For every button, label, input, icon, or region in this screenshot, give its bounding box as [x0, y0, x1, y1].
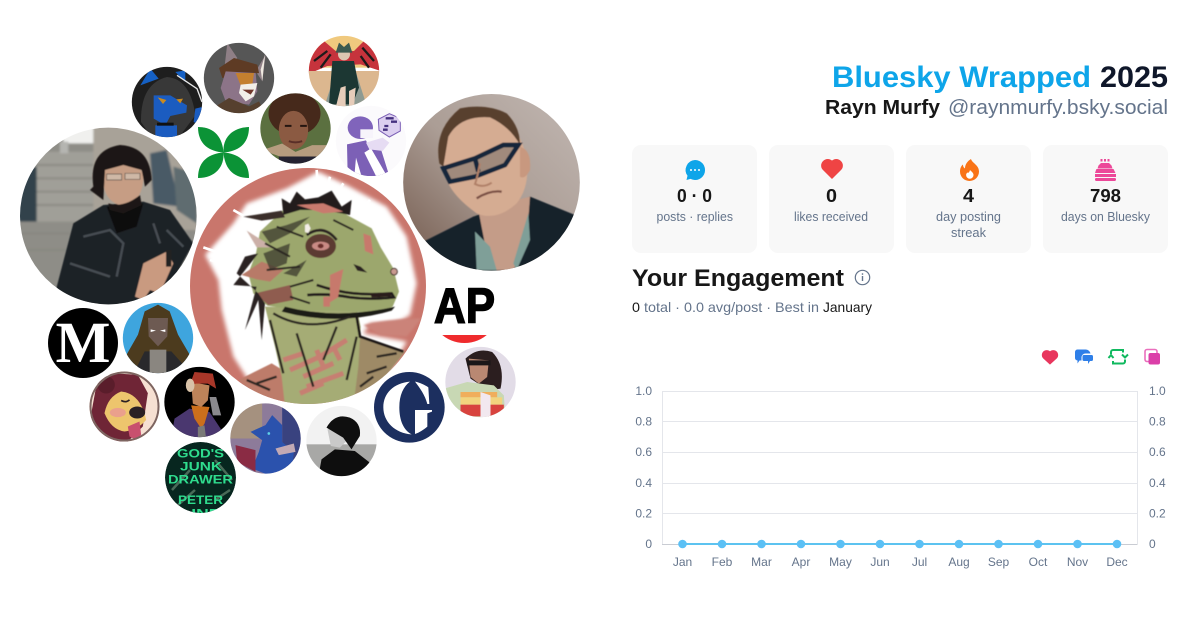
- avatar: woman with curly hair: [259, 92, 332, 166]
- stat card: likes received: likes received: [794, 210, 868, 224]
- avatar: large dragon illustration: [190, 160, 430, 410]
- avatar: God's Junk Drawer book cover: PETER: [178, 493, 223, 507]
- stat card: posts and replies: [632, 145, 757, 253]
- stat card: days on Bluesky: days on Bluesky: [1061, 210, 1151, 224]
- avatar: man in leather jacket: [20, 128, 197, 304]
- avatar: long-haired anime character: [121, 301, 195, 375]
- engagement summary: 0: [632, 299, 640, 315]
- month labels: Jan: [673, 555, 692, 569]
- icon: chat bubble: [686, 160, 705, 180]
- left axis labels: 0.6: [635, 445, 652, 459]
- avatar: God's Junk Drawer book cover: [165, 442, 236, 520]
- avatar: God's Junk Drawer book cover: GOD'S: [177, 446, 224, 460]
- avatar: anime figure on red background: [307, 34, 381, 108]
- icon: replies: [1075, 349, 1093, 364]
- avatar: God's Junk Drawer book cover: DRAWER: [168, 472, 233, 486]
- stat card: posting streak: [906, 145, 1031, 253]
- avatar: man with glasses: [400, 93, 583, 277]
- avatar: woman in sunglasses and unicorn shirt: [444, 345, 517, 419]
- month labels: Aug: [948, 555, 970, 569]
- stat card: posting streak: day posting: [936, 210, 1001, 224]
- user name and handle: @raynmurfy.bsky.social: [948, 97, 1168, 119]
- right axis labels: 0: [1149, 537, 1156, 551]
- stat card: likes received: 0: [826, 186, 837, 206]
- avatar: red-haired man in purple coat: [163, 365, 236, 439]
- avatar: Guardian G logo: [374, 372, 445, 443]
- avatar: AP logo: AP: [434, 280, 495, 334]
- avatar: fox character: [202, 41, 276, 115]
- heading: Your Engagement: Your Engagement: [632, 265, 844, 292]
- avatar: Medium M logo: M: [56, 310, 110, 375]
- user name and handle: [825, 97, 1168, 119]
- month labels: Sep: [988, 555, 1009, 569]
- avatar: God's Junk Drawer book cover: LINE: [180, 506, 220, 520]
- icon: quotes: [1145, 350, 1160, 364]
- line chart: monthly engagement: [635, 384, 1166, 569]
- avatar: black and white photo of woman: [305, 404, 378, 478]
- engagement summary: total · 0.0 avg/post · Best in: [644, 299, 819, 315]
- icon: info: [855, 270, 870, 285]
- icon: cake: [1095, 159, 1116, 181]
- right axis labels: 0.4: [1149, 476, 1166, 490]
- right axis labels: 0.2: [1149, 506, 1166, 520]
- icon: heart: [822, 160, 842, 178]
- month labels: Nov: [1067, 555, 1088, 569]
- stat card: posts and replies: posts · replies: [656, 210, 733, 224]
- avatar: God's Junk Drawer book cover: JUNK: [180, 460, 222, 474]
- user name and handle: Rayn Murfy: [825, 97, 941, 119]
- stat card: likes received: [769, 145, 894, 253]
- icon: flame: [960, 159, 979, 181]
- month labels: [673, 555, 1128, 569]
- avatar: black and blue furry: [130, 65, 204, 140]
- avatar: blue dragon reading a book: [229, 402, 302, 475]
- left axis labels: 0.8: [635, 414, 652, 428]
- right axis labels: 1.0: [1149, 384, 1166, 398]
- month labels: Mar: [751, 555, 772, 569]
- stat card: posting streak: streak: [951, 226, 987, 240]
- avatar: cartoon bear with tongue: [88, 370, 161, 443]
- month labels: Dec: [1106, 555, 1128, 569]
- engagement summary: January: [823, 299, 872, 315]
- left axis labels: 0.2: [635, 506, 652, 520]
- avatar: green four-petal logo: [198, 127, 249, 178]
- month labels: Feb: [712, 555, 733, 569]
- icon: likes: [1042, 351, 1058, 364]
- month labels: Apr: [792, 555, 810, 569]
- stat card: posting streak: 4: [963, 186, 974, 206]
- right axis labels: 0.8: [1149, 414, 1166, 428]
- right axis labels: 0.6: [1149, 445, 1166, 459]
- chart legend icons: [1042, 349, 1160, 364]
- avatar: purple line art with dice: [347, 113, 401, 176]
- left axis labels: [635, 384, 652, 551]
- month labels: Jun: [870, 555, 890, 569]
- left axis labels: 0.4: [635, 476, 652, 490]
- right axis labels: [1149, 384, 1166, 551]
- left axis labels: 1.0: [635, 384, 652, 398]
- month labels: Oct: [1029, 555, 1048, 569]
- month labels: Jul: [912, 555, 927, 569]
- avatar: AP logo: [434, 288, 494, 343]
- title: 2025: [1100, 61, 1168, 94]
- month labels: May: [829, 555, 852, 569]
- stat card: days on Bluesky: [1043, 145, 1168, 253]
- avatar cluster: [10, 30, 583, 520]
- left axis labels: 0: [645, 537, 652, 551]
- icon: reposts: [1108, 350, 1128, 364]
- stat card: posts and replies: 0 · 0: [677, 186, 712, 206]
- stat card: days on Bluesky: 798: [1090, 186, 1121, 206]
- title: Bluesky Wrapped: [832, 61, 1091, 94]
